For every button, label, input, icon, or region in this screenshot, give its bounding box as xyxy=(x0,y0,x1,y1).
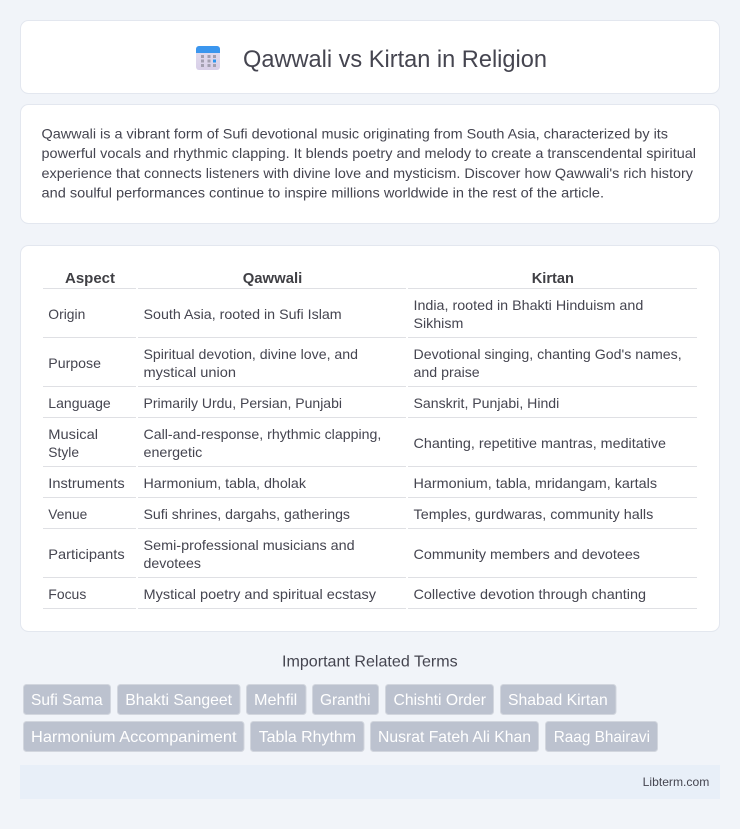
text block: introduction: experience that connects listeners with divine love and mysticism. Discover how Qawwali's rich history xyxy=(42,165,693,181)
row: Origin: India, rooted in Bhakti Hinduism and xyxy=(414,297,643,313)
row: Instruments: Instruments xyxy=(48,475,125,491)
tag: Tabla Rhythm xyxy=(250,722,364,752)
title: Qawwali vs Kirtan in Religion xyxy=(243,46,547,73)
row: Musical Style xyxy=(48,426,666,460)
row: Venue xyxy=(48,506,653,522)
table header row: Kirtan xyxy=(532,270,574,287)
row: Language: Sanskrit, Punjabi, Hindi xyxy=(414,395,559,411)
icon: calendar xyxy=(196,46,220,70)
row: Focus xyxy=(48,586,646,602)
row: Purpose: Purpose xyxy=(48,355,101,371)
tag: Nusrat Fateh Ali Khan: Nusrat Fateh Ali Khan xyxy=(378,729,531,746)
row: Purpose: Spiritual devotion, divine love, and xyxy=(144,346,358,362)
row: Venue: Sufi shrines, dargahs, gatherings xyxy=(144,506,350,522)
row: Language xyxy=(48,395,559,411)
row: Language: Language xyxy=(48,395,111,411)
row: Purpose: and praise xyxy=(414,364,480,380)
row: Focus: Mystical poetry and spiritual ecstasy xyxy=(144,586,376,602)
tag: Raag Bhairavi xyxy=(546,722,658,752)
row: Musical Style: Style xyxy=(48,444,79,460)
row: Origin: Sikhism xyxy=(414,315,463,331)
tag: Harmonium Accompaniment xyxy=(24,722,244,752)
tag: Harmonium Accompaniment: Harmonium Accompaniment xyxy=(31,729,237,746)
text block: introduction: powerful vocals and rhythmic clapping. It blends poetry and melody to create a transcendental spiritual xyxy=(42,145,696,161)
row: Purpose: mystical union xyxy=(144,364,236,380)
tag list xyxy=(24,684,658,752)
row: Instruments: Harmonium, tabla, mridangam, kartals xyxy=(414,475,657,491)
row: Purpose: Devotional singing, chanting God's names, xyxy=(414,346,682,362)
table header row: Aspect xyxy=(65,270,115,287)
row: Language: Primarily Urdu, Persian, Punjabi xyxy=(144,395,342,411)
row: Musical Style: Call-and-response, rhythmic clapping, xyxy=(144,426,381,442)
text block: introduction: and soulful performances continue to inspire millions worldwide in the rest of the article. xyxy=(42,184,604,200)
row: Venue: Temples, gurdwaras, community halls xyxy=(414,506,653,522)
tag: Raag Bhairavi: Raag Bhairavi xyxy=(554,729,650,746)
text block: introduction xyxy=(42,126,696,200)
tag: Tabla Rhythm: Tabla Rhythm xyxy=(259,729,356,746)
tag: Shabad Kirtan: Shabad Kirtan xyxy=(508,692,608,709)
table header row: Qawwali xyxy=(243,270,302,287)
row: Musical Style: Musical xyxy=(48,426,98,442)
heading: important related terms: Important Related Terms xyxy=(282,654,458,671)
row: Venue: Venue xyxy=(48,506,88,522)
row: Participants xyxy=(48,537,640,571)
panel: comparison table card xyxy=(20,246,720,632)
row: Purpose xyxy=(48,346,682,380)
row: Origin: Origin xyxy=(48,306,85,322)
row: Origin xyxy=(48,297,643,331)
row: Participants: Semi-professional musicians and xyxy=(144,537,355,553)
row: Focus: Collective devotion through chanting xyxy=(414,586,646,602)
tag: Chishti Order: Chishti Order xyxy=(394,692,487,709)
row: Musical Style: Chanting, repetitive mantras, meditative xyxy=(414,435,666,451)
row: Participants: Participants xyxy=(48,546,125,562)
tag: Sufi Sama: Sufi Sama xyxy=(31,692,103,709)
tag: Bhakti Sangeet xyxy=(118,684,240,714)
tag: Shabad Kirtan xyxy=(500,684,616,714)
row: Participants: devotees xyxy=(144,555,201,571)
footer bar xyxy=(20,765,720,799)
text block: introduction: Qawwali is a vibrant form of Sufi devotional music originating from South Asia, characterized by its xyxy=(42,126,668,142)
tag: Granthi xyxy=(312,684,378,714)
tag: Bhakti Sangeet: Bhakti Sangeet xyxy=(125,692,233,709)
panel: introduction card xyxy=(20,104,720,224)
row: Focus: Focus xyxy=(48,586,86,602)
row: Instruments xyxy=(48,475,657,491)
row: Origin: South Asia, rooted in Sufi Islam xyxy=(144,306,342,322)
row: Participants: Community members and devotees xyxy=(414,546,640,562)
tag: Granthi: Granthi xyxy=(320,692,370,709)
tag: Mehfil xyxy=(246,684,306,714)
table header row xyxy=(65,270,574,287)
row: Musical Style: energetic xyxy=(144,444,202,460)
tag: Mehfil: Mehfil xyxy=(254,692,297,709)
tag: Nusrat Fateh Ali Khan xyxy=(370,722,538,752)
tag: Sufi Sama xyxy=(24,684,110,714)
tag: Chishti Order xyxy=(386,684,494,714)
row: Instruments: Harmonium, tabla, dholak xyxy=(144,475,307,491)
panel: header card xyxy=(20,20,720,94)
footer credit: Libterm.com xyxy=(643,775,709,789)
